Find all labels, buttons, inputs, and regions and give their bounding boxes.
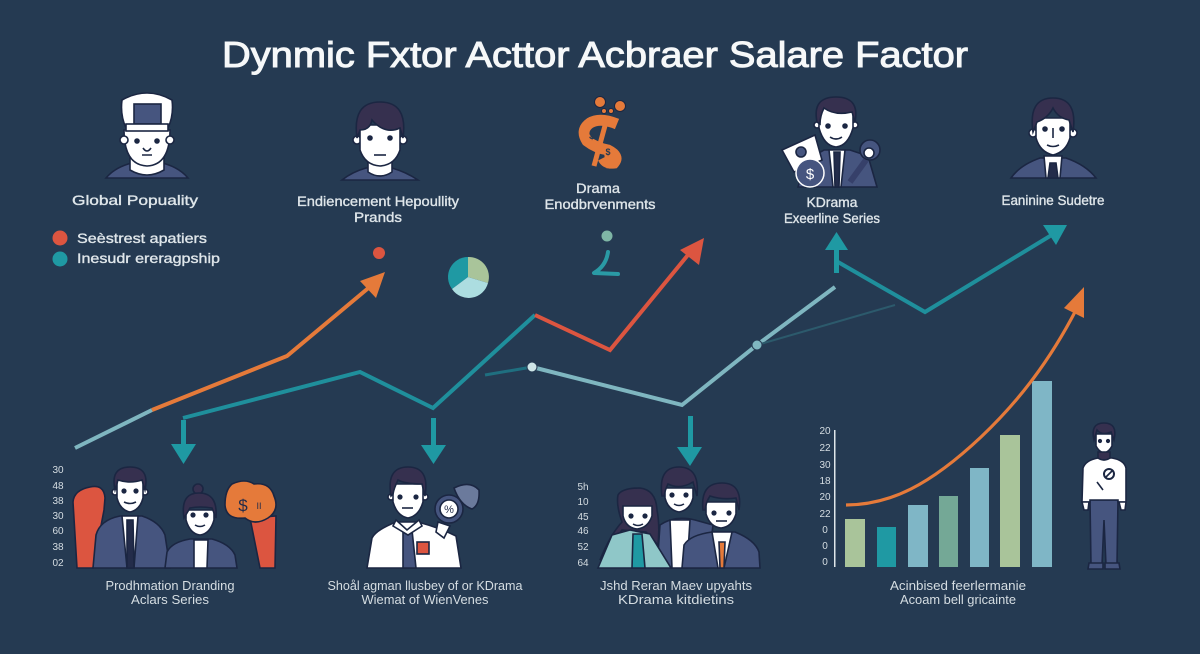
trend line: teal then red xyxy=(183,238,704,418)
label: earnings: Eaninine Sudetre xyxy=(1002,192,1105,208)
illustration: production team xyxy=(73,467,276,568)
illustration: three kdrama actors xyxy=(598,467,760,568)
caption: production: Aclars Series xyxy=(131,592,210,607)
caption: kdrama survey: Wiemat of WienVenes xyxy=(362,592,489,607)
icon: man in suit xyxy=(1011,98,1096,178)
icon: young man xyxy=(342,102,418,180)
label: kdrama series: KDrama xyxy=(806,194,858,210)
caption: chart: Acinbised feerlermanie xyxy=(890,578,1026,593)
caption: kdrama survey: Shoål agman llusbey of or KDrama xyxy=(328,578,523,593)
axis numbers: group three: 64 xyxy=(577,558,589,569)
axis numbers: group three: 45 xyxy=(577,512,589,523)
illustration: production team: $ xyxy=(238,496,248,515)
caption: chart xyxy=(890,578,1026,607)
icon: actor with money and microphone xyxy=(782,97,880,187)
axis labels: 18 xyxy=(819,476,831,487)
label: drama endorsements: Drama xyxy=(576,180,620,196)
bars xyxy=(845,381,1052,567)
label: endorsement: Endiencement Hepoullity xyxy=(297,193,459,209)
axis labels: 22 xyxy=(819,509,831,520)
icon: teal figure xyxy=(594,230,618,274)
caption: production: Prodhmation Dranding xyxy=(106,578,234,593)
icon: orange money: $ xyxy=(605,147,611,157)
title: Dynmic Fxtor Acttor Acbraer Salare Factor xyxy=(222,34,968,75)
axis numbers: group one: 48 xyxy=(52,481,64,492)
bar chart xyxy=(819,287,1084,568)
caption: actors: Jshd Reran Maev upyahts xyxy=(600,578,752,593)
axis labels xyxy=(819,426,831,568)
label: drama endorsements: Enodbrvenments xyxy=(544,196,656,212)
axis numbers: group three: 46 xyxy=(577,526,589,537)
axis labels: 20 xyxy=(819,426,831,437)
legend: Seèstrest apatiers xyxy=(77,230,207,246)
icon: orange money xyxy=(584,96,626,168)
illustration: man with clock xyxy=(367,467,479,568)
axis labels: 20 xyxy=(819,492,831,503)
axis labels: 0 xyxy=(822,525,828,536)
trend line: light teal xyxy=(485,287,895,405)
axis labels: 0 xyxy=(822,557,828,568)
axis numbers: group one: 60 xyxy=(52,526,64,537)
pie chart xyxy=(448,257,489,298)
arrow: up teal xyxy=(825,232,848,273)
icon: actor with money and microphone: $ xyxy=(806,166,815,183)
axis xyxy=(834,430,836,567)
label: kdrama series xyxy=(784,194,880,226)
label: drama endorsements xyxy=(544,180,656,212)
icon: orange money: $ xyxy=(589,130,595,142)
axis numbers: group one: 38 xyxy=(52,496,64,507)
icon: person with hat xyxy=(106,93,188,178)
legend: Inesudr ereragpship xyxy=(77,250,220,266)
arrow: down left xyxy=(171,420,196,464)
label: endorsement: Prands xyxy=(354,209,402,225)
illustration: man with clock: % xyxy=(444,504,454,516)
axis labels: 22 xyxy=(819,443,831,454)
illustration: production team: II xyxy=(256,501,262,511)
trend line: orange rising xyxy=(75,272,385,448)
icon: standing person xyxy=(1082,423,1126,569)
legend xyxy=(52,230,220,266)
trend curve with arrow xyxy=(846,287,1084,505)
label: global popularity: Global Popuality xyxy=(72,192,198,208)
caption: kdrama survey xyxy=(328,578,523,607)
axis labels: 30 xyxy=(819,460,831,471)
axis numbers: group one: 30 xyxy=(52,465,64,476)
axis numbers: group three: 52 xyxy=(577,542,589,553)
axis numbers: group three xyxy=(577,482,589,569)
caption: chart: Acoam bell gricainte xyxy=(900,592,1016,607)
label: kdrama series: Exeerline Series xyxy=(784,210,880,226)
axis numbers: group three: 10 xyxy=(577,497,589,508)
caption: actors: KDrama kitdietins xyxy=(618,592,735,607)
label: endorsement xyxy=(297,193,459,225)
axis numbers: group three: 5h xyxy=(577,482,589,493)
red dot marker xyxy=(373,247,385,259)
axis numbers: group one: 38 xyxy=(52,542,64,553)
axis numbers: group one xyxy=(52,465,64,569)
caption: production xyxy=(106,578,234,607)
axis numbers: group one: 30 xyxy=(52,511,64,522)
trend line: teal with arrow xyxy=(838,225,1067,312)
axis labels: 0 xyxy=(822,541,828,552)
axis numbers: group one: 02 xyxy=(52,558,64,569)
arrow: down middle xyxy=(421,418,446,464)
arrow: down right xyxy=(677,416,702,466)
caption: actors xyxy=(600,578,752,607)
